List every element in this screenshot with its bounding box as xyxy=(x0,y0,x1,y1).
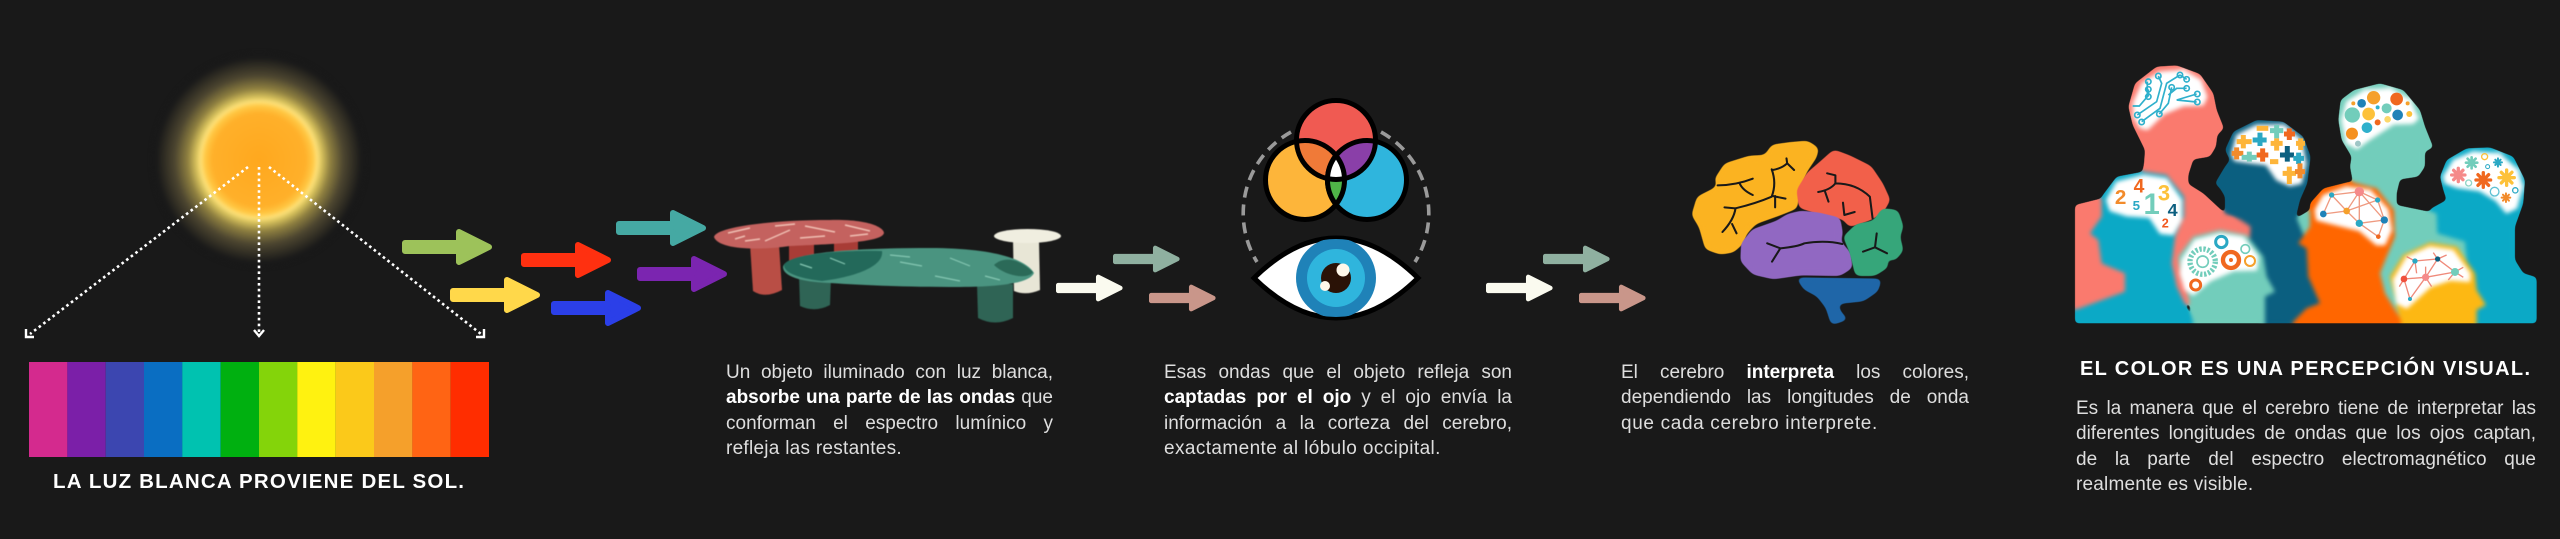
heading: el color es una percepción visual: EL COLOR ES UNA PERCEPCIÓN VISUAL. xyxy=(2080,356,2530,380)
text block: objeto iluminado: Un objeto iluminado con luz blanca, xyxy=(726,362,1053,383)
arrow: reflected white xyxy=(1058,277,1120,299)
table: red marble top xyxy=(714,220,884,249)
illustration: group of heads with brains xyxy=(2075,65,2537,323)
text block: objeto iluminado: refleja las restantes. xyxy=(726,438,902,459)
text block: ondas captadas por el ojo xyxy=(1164,362,1512,459)
table: white side table xyxy=(994,229,1061,293)
text block: objeto iluminado: conforman el espectro lumínico y xyxy=(726,413,1053,434)
white brain shapes xyxy=(2107,71,2522,307)
ray: centre xyxy=(254,167,264,336)
arrow: yellow xyxy=(453,280,537,310)
head: mint top-right xyxy=(2296,83,2473,322)
brain contents: bubbles xyxy=(2345,91,2412,147)
brain contents: numbers: 3 xyxy=(2158,181,2170,206)
brain contents: network orange xyxy=(2320,187,2388,239)
icon: sun with glow xyxy=(151,52,367,268)
text block: el cerebro interpreta: que cada cerebro interprete. xyxy=(1621,413,1878,434)
brain contents: numbers: 2 xyxy=(2115,186,2126,209)
text block: ondas captadas por el ojo: exactamente al lóbulo occipital. xyxy=(1164,438,1441,459)
head: cyan left xyxy=(2075,172,2194,323)
text block: definición del color: diferentes longitudes de ondas que los ojos captan, xyxy=(2076,423,2536,444)
brain lobe: yellow xyxy=(1691,141,1819,255)
table: green legs xyxy=(799,276,1013,322)
eye xyxy=(1254,238,1418,318)
icon: eye with colour circles xyxy=(1243,100,1429,318)
brain contents: numbers: 4 xyxy=(2168,200,2178,220)
head: mint bottom xyxy=(2178,230,2275,323)
arrow: interpreted sage xyxy=(1545,248,1607,270)
table legs behind xyxy=(750,238,858,295)
ray: left xyxy=(26,167,248,337)
brain lobe: purple xyxy=(1740,211,1853,279)
brain lobe: red xyxy=(1796,149,1890,227)
dashed arc around the eye xyxy=(1243,132,1429,262)
text block: ondas captadas por el ojo: captadas por el ojo y el ojo envía la xyxy=(1164,387,1512,408)
head: cyan right xyxy=(2428,147,2537,323)
coloured light wave arrows xyxy=(405,213,724,323)
head: salmon top-left xyxy=(2075,65,2253,311)
head: yellow xyxy=(2390,243,2486,323)
table: green marble top xyxy=(783,248,1034,287)
heading: la luz blanca: LA LUZ BLANCA PROVIENE DEL SOL. xyxy=(53,470,464,493)
brain lobe: green xyxy=(1843,208,1904,276)
brain contents: asterisks xyxy=(2452,154,2518,202)
text block: el cerebro interpreta: El cerebro interpreta los colores, xyxy=(1621,362,1969,383)
text block: definición del color: realmente es visible. xyxy=(2076,474,2253,495)
brain contents: puzzle xyxy=(2232,125,2305,184)
arrow: reflected sage xyxy=(1115,248,1177,270)
text block: el cerebro interpreta xyxy=(1621,362,1969,434)
text block: ondas captadas por el ojo: Esas ondas que el objeto refleja son xyxy=(1164,362,1512,383)
brain contents: numbers: 4 xyxy=(2134,177,2145,198)
arrow: teal xyxy=(619,213,703,243)
text block: ondas captadas por el ojo: información a la corteza del cerebro, xyxy=(1164,413,1512,434)
brain contents: numbers: 5 xyxy=(2133,198,2141,213)
brain folds xyxy=(1718,158,1887,262)
arrow: reflected pink xyxy=(1151,287,1213,309)
arrow: blue xyxy=(554,293,638,323)
text block: definición del color: de la parte del espectro electromagnético que xyxy=(2076,449,2536,470)
dotted rays from the sun to the spectrum xyxy=(26,167,484,337)
ray: right xyxy=(269,167,484,337)
text block: definición del color xyxy=(2076,398,2536,495)
text block: objeto iluminado xyxy=(726,362,1053,459)
brain contents: network yellow xyxy=(2399,253,2463,301)
spectrum colour bar xyxy=(29,362,489,457)
head: navy centre xyxy=(2215,120,2333,323)
icon: coloured brain xyxy=(1691,141,1904,325)
colour circles venn xyxy=(1266,100,1406,220)
text block: el cerebro interpreta: dependiendo las longitudes de onda xyxy=(1621,387,1969,408)
brain contents: numbers: 1 xyxy=(2144,188,2160,221)
text block: definición del color: Es la manera que el cerebro tiene de interpretar las xyxy=(2076,398,2536,419)
arrow: red xyxy=(524,245,608,275)
arrow: interpreted white xyxy=(1488,277,1550,299)
text block: objeto iluminado: absorbe una parte de las ondas que xyxy=(726,387,1053,408)
head: orange xyxy=(2292,182,2403,323)
brain contents: numbers xyxy=(2115,177,2178,231)
illustration: marble tables xyxy=(714,220,1061,322)
brain lobe: blue stem xyxy=(1796,277,1882,325)
brain contents: circuit xyxy=(2133,72,2200,125)
brain contents: gears xyxy=(2190,236,2255,290)
arrow: green xyxy=(405,232,489,262)
brain contents: numbers: 2 xyxy=(2162,217,2169,231)
arrow: interpreted pink xyxy=(1581,287,1643,309)
main illustration canvas xyxy=(24,60,2537,488)
arrow: purple xyxy=(640,259,724,289)
